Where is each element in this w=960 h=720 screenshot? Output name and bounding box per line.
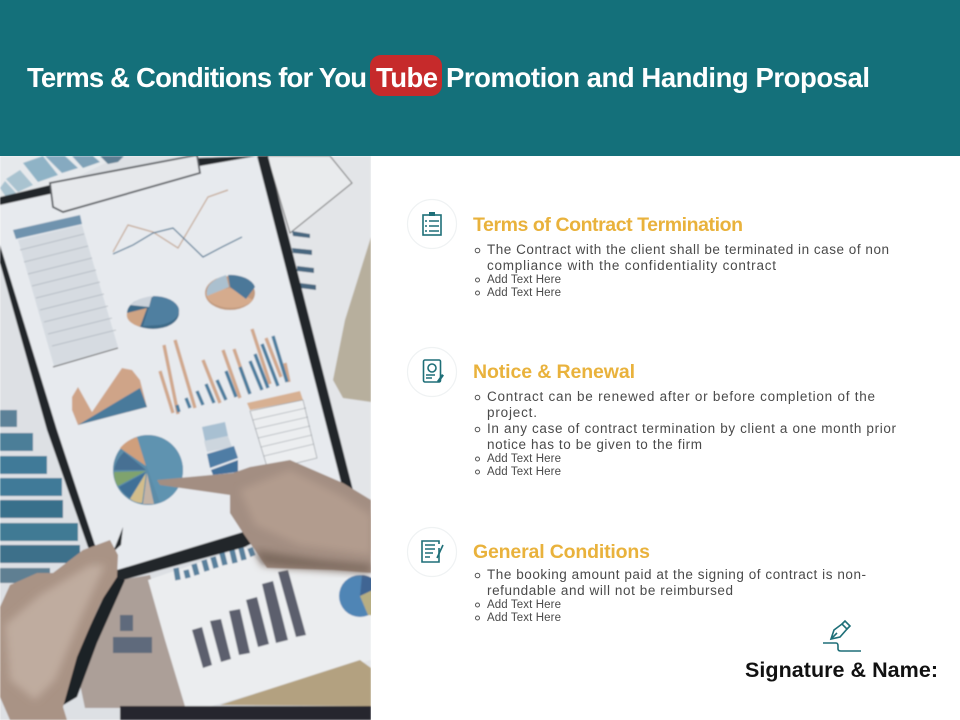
lower brown area: [80, 574, 186, 709]
bottom dark strip: [120, 706, 371, 720]
bullet list: In any case of contract termination by client a one month prior: [487, 421, 896, 436]
title: [27, 55, 870, 96]
icon: document with pen: [408, 528, 456, 576]
heading: Terms of Contract Termination: [473, 214, 743, 236]
bullet list: project.: [487, 405, 537, 420]
item: notice and renewal: [408, 348, 896, 478]
tablet: [333, 237, 371, 402]
icon: document with seal: [408, 348, 456, 396]
bullet list: refundable and will not be reimbursed: [487, 583, 733, 598]
blue ticks on right paper: [292, 231, 316, 290]
lower paper bars: [192, 570, 306, 668]
item: general conditions: [408, 528, 866, 624]
data table: [13, 215, 118, 367]
small pie lower right: [338, 574, 371, 618]
bullet list: Add Text Here: [487, 599, 561, 611]
clipboard frame: [0, 156, 353, 580]
photo: hands reviewing charts on a clipboard: [0, 155, 381, 720]
bullet list: Contract can be renewed after or before completion of the: [487, 389, 875, 404]
top-right paper: [262, 156, 371, 720]
pie charts: [127, 275, 255, 329]
right hand: [157, 460, 371, 573]
clipboard paper: [0, 156, 343, 570]
bullet list: compliance with the confidentiality contract: [487, 258, 776, 273]
bullet list: Add Text Here: [487, 453, 561, 465]
pen: [60, 527, 125, 707]
item: terms of contract termination: [408, 200, 889, 299]
heading: Notice & Renewal: [473, 361, 635, 383]
title: Terms & Conditions for You: [27, 62, 367, 93]
clip: [50, 155, 200, 212]
bullet list: notice has to be given to the firm: [487, 437, 702, 452]
bullet list: [475, 389, 896, 478]
stacked column: [202, 422, 238, 475]
bullet list: The Contract with the client shall be terminated in case of non: [487, 242, 889, 257]
bullet list: [475, 242, 889, 299]
bullet list: [475, 567, 866, 624]
heading: General Conditions: [473, 541, 650, 563]
title: Promotion and Handing Proposal: [446, 62, 870, 93]
lower-right paper: [148, 547, 371, 713]
bar chart: [160, 329, 289, 414]
top-left paper with bars: [0, 156, 124, 200]
left hand: [0, 540, 118, 720]
line chart: [113, 190, 242, 257]
icon: clipboard checklist: [408, 200, 456, 248]
big pie chart: [113, 435, 183, 505]
bullet list: Add Text Here: [487, 274, 561, 286]
bullet list: Add Text Here: [487, 466, 561, 478]
bullet list: The booking amount paid at the signing of contract is non-: [487, 567, 866, 582]
signature label: Signature & Name:: [745, 658, 938, 682]
small table: [247, 391, 317, 470]
area chart: [72, 368, 147, 425]
left paper bars: [0, 410, 80, 583]
header band: [0, 0, 960, 156]
bullet list: Add Text Here: [487, 612, 561, 624]
icon: fountain pen signature: [823, 621, 861, 651]
title: Tube: [376, 62, 438, 93]
bullet list: Add Text Here: [487, 287, 561, 299]
YouTube red badge: [370, 55, 442, 96]
